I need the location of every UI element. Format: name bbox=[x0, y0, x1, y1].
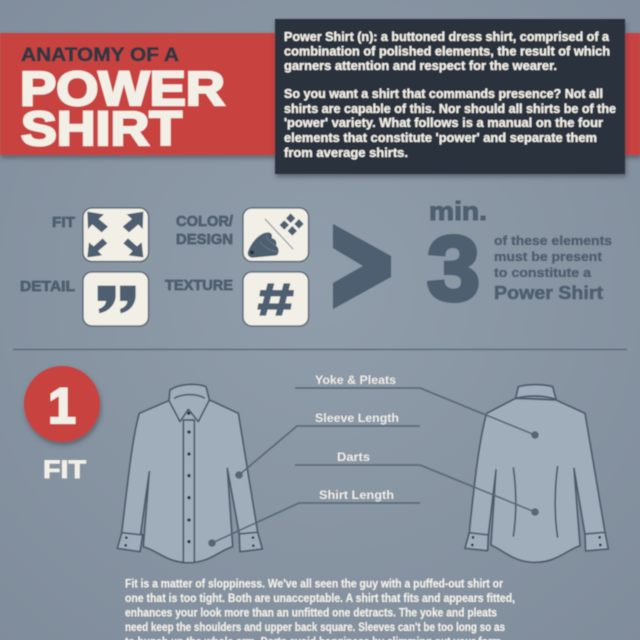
section heading: fit: FIT bbox=[43, 456, 86, 484]
callout: yoke and pleats bbox=[295, 375, 539, 439]
text block: fit explanation: enhances your look more than an unfitted one detracts. The yoke and pleats bbox=[125, 606, 497, 620]
big number 3: 3 bbox=[427, 218, 480, 320]
icon: detail quote marks bbox=[83, 272, 148, 326]
min 3 callout bbox=[427, 196, 612, 320]
text block: fit explanation: Fit is a matter of sloppiness. We've all seen the guy with a puffed-out shirt or bbox=[125, 576, 503, 590]
panel: definition: garners attention and respect for the wearer. bbox=[284, 59, 557, 73]
requirement text: must be present bbox=[494, 250, 603, 264]
panel: definition: combination of polished elements, the result of which bbox=[284, 44, 610, 58]
label: color/design: DESIGN bbox=[176, 232, 233, 248]
callout: shirt length: Shirt Length bbox=[319, 490, 394, 502]
panel: definition bbox=[275, 19, 625, 174]
panel: definition: elements that constitute 'power' and separate them bbox=[284, 131, 597, 145]
panel: definition: from average shirts. bbox=[284, 146, 408, 160]
callout: yoke and pleats: Yoke & Pleats bbox=[315, 375, 396, 387]
text block: fit explanation bbox=[125, 576, 515, 640]
requirement text: Power Shirt bbox=[494, 283, 603, 303]
header band bbox=[0, 33, 640, 156]
callout: sleeve length: Sleeve Length bbox=[315, 413, 399, 425]
title: anatomy of a: ANATOMY OF A bbox=[21, 44, 179, 66]
icon: color swatches bbox=[243, 208, 308, 262]
callout: darts: Darts bbox=[337, 452, 370, 464]
requirement text bbox=[494, 234, 612, 303]
arrow: greater than bbox=[333, 224, 391, 309]
label: detail: DETAIL bbox=[20, 279, 75, 295]
label: color/design bbox=[176, 214, 233, 248]
requirement text: to constitute a bbox=[494, 266, 592, 280]
text block: fit explanation: need keep the shoulders and upper back square. Sleeves can't be too long so as bbox=[125, 620, 505, 634]
panel: definition: 'power' variety. What follows is a manual on the four bbox=[284, 116, 603, 130]
title: power: POWER bbox=[20, 63, 225, 116]
section badge: 1 bbox=[24, 366, 100, 442]
shirt back bbox=[465, 385, 608, 562]
icon: fit arrows bbox=[83, 208, 148, 262]
callout: darts bbox=[295, 452, 539, 516]
label: fit: FIT bbox=[52, 215, 75, 231]
callout: sleeve length bbox=[235, 413, 420, 479]
icon: texture hash bbox=[243, 272, 308, 326]
section badge: 1: 1 bbox=[48, 378, 76, 434]
label: color/design: COLOR/ bbox=[176, 214, 233, 230]
text block: fit explanation: one that is too tight. Both are unacceptable. A shirt that fits and appears fitted, bbox=[125, 591, 515, 605]
panel: definition: So you want a shirt that commands presence? Not all bbox=[284, 87, 603, 101]
panel: definition: shirts are capable of this. Nor should all shirts be of the bbox=[284, 102, 616, 116]
panel: definition: Power Shirt (n): a buttoned dress shirt, comprised of a bbox=[284, 30, 610, 44]
label: texture: TEXTURE bbox=[165, 278, 233, 294]
min label: min. bbox=[429, 196, 487, 226]
title: shirt: SHIRT bbox=[21, 103, 182, 156]
callout: shirt length bbox=[208, 490, 420, 547]
requirement text: of these elements bbox=[494, 234, 612, 248]
shirt front bbox=[117, 384, 262, 563]
